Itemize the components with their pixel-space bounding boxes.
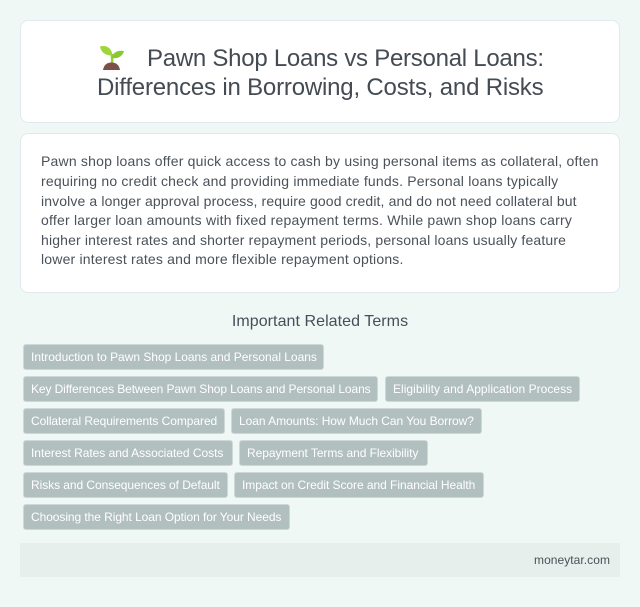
summary text: lower interest rates and more flexible repayment options. [41, 251, 404, 267]
icon: seedling [100, 46, 124, 70]
chip: Interest Rates and Associated Costs [31, 446, 223, 460]
chip [385, 376, 580, 402]
chip [23, 440, 233, 466]
chip [23, 376, 378, 402]
chip: Introduction to Pawn Shop Loans and Personal Loans [31, 350, 317, 364]
title line 1: Pawn Shop Loans vs Personal Loans: [147, 45, 544, 72]
footer source: moneytar.com [534, 553, 610, 567]
chip [239, 440, 428, 466]
chip: Collateral Requirements Compared [31, 414, 217, 428]
summary text: involve a longer approval process, require good credit, and do not need collateral but [41, 193, 577, 209]
chip: Eligibility and Application Process [393, 382, 572, 396]
chip [23, 504, 290, 530]
chip [23, 408, 225, 434]
related terms chips [23, 344, 580, 530]
title line 2: Differences in Borrowing, Costs, and Risks [97, 74, 543, 101]
chip [231, 408, 482, 434]
chip [23, 472, 228, 498]
chip: Key Differences Between Pawn Shop Loans and Personal Loans [31, 382, 371, 396]
chip: Choosing the Right Loan Option for Your Needs [31, 510, 281, 524]
summary text: higher interest rates and shorter repayment periods, personal loans usually feature [41, 232, 566, 248]
summary text: Pawn shop loans offer quick access to cash by using personal items as collateral, often [41, 153, 599, 169]
chip: Repayment Terms and Flexibility [247, 446, 418, 460]
chip: Impact on Credit Score and Financial Health [242, 478, 475, 492]
summary text [41, 153, 599, 267]
chip: Loan Amounts: How Much Can You Borrow? [239, 414, 474, 428]
summary panel [20, 133, 620, 293]
summary text: offer larger loan amounts with fixed repayment terms. While pawn shop loans carry [41, 212, 572, 228]
footer bar [20, 543, 620, 577]
heading: important related terms: Important Related Terms [232, 313, 408, 330]
chip [23, 344, 324, 370]
chip: Risks and Consequences of Default [31, 478, 220, 492]
chip [234, 472, 484, 498]
title panel [20, 20, 620, 123]
summary text: requiring no credit check and providing immediate funds. Personal loans typically [41, 173, 558, 189]
